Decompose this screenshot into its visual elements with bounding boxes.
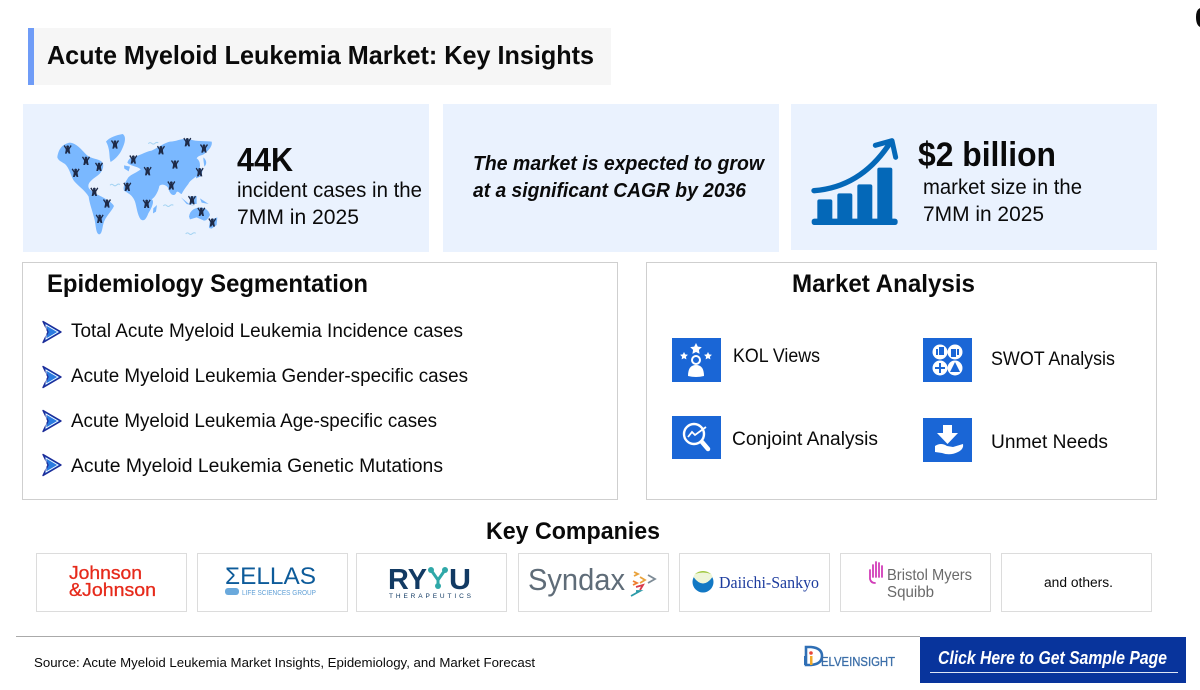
icon: world map with patients [57,134,217,234]
button: sample page [920,637,1186,683]
heading: Epidemiology Segmentation [47,270,368,298]
KOL views item: KOL Views [733,346,820,367]
title [28,28,611,85]
panel: epidemiology segmentation [22,262,618,500]
SWOT analysis item [923,338,1115,382]
icon: growth chart [812,141,898,225]
logo: Bristol Myers Squibb: Bristol Myers [887,567,972,584]
logo: DelveInsight [804,647,895,669]
panel: market analysis [646,262,1156,500]
unmet needs item [923,418,1108,462]
logo: Daiichi-Sankyo [680,554,830,612]
panel: market size [791,104,1157,250]
logo: SELLAS: LIFE SCIENCES GROUP [242,588,316,597]
logo: SELLAS [198,554,348,612]
heading: Market Analysis [792,270,975,298]
logo: Johnson & Johnson: Johnson [69,563,142,583]
list item 1: Total Acute Myeloid Leukemia Incidence cases [71,321,463,342]
logo: Syndax [518,554,668,612]
stat: $2 billion: $2 billion [918,136,1056,174]
heading: key companies: Key Companies [486,518,660,545]
box: and others: and others. [1044,575,1113,590]
logo: RYVU: U [449,564,471,596]
source note: Source: Acute Myeloid Leukemia Market Insights, Epidemiology, and Market Forecast [34,655,535,670]
stat description [923,176,1082,226]
logo: Bristol Myers Squibb: Squibb [887,584,934,601]
stat description: 7MM in 2025 [923,203,1044,226]
SWOT analysis item: SWOT Analysis [991,349,1115,370]
panel: incident cases [23,104,429,252]
logo: Daiichi-Sankyo: Daiichi-Sankyo [719,573,819,592]
list item 3: Acute Myeloid Leukemia Age-specific cases [71,411,437,432]
panel: growth statement: The market is expected to grow [473,153,765,175]
conjoint analysis item [672,416,878,459]
logo: DelveInsight: ELVEINSIGHT [821,654,895,669]
stat description [237,179,422,229]
stat: 44K: 44K [237,141,293,178]
panel: growth statement [443,104,779,252]
logo: RYVU [356,554,506,612]
footer rule [16,636,920,637]
conjoint analysis item: Conjoint Analysis [732,429,878,450]
logo: Syndax: Syndax [528,562,625,597]
stat description: incident cases in the [237,179,422,202]
list item 2: Acute Myeloid Leukemia Gender-specific cases [71,366,468,387]
logo: RYVU: RY [388,564,427,596]
stat description: 7MM in 2025 [237,206,359,229]
box: and others [1002,554,1152,612]
logo: Johnson & Johnson: &Johnson [69,580,156,600]
logo: Johnson & Johnson [36,554,186,612]
KOL views item [672,338,820,382]
logo: RYVU: THERAPEUTICS [389,593,472,600]
list item 4: Acute Myeloid Leukemia Genetic Mutations [71,456,443,477]
logo: SELLAS: ΣELLAS [225,563,316,590]
panel: growth statement: at a significant CAGR by 2036 [473,180,747,202]
button: sample page: Click Here to Get Sample Page [938,648,1167,668]
corner glyph fragment [1196,8,1200,27]
title: Acute Myeloid Leukemia Market: Key Insights [47,40,594,70]
unmet needs item: Unmet Needs [991,432,1108,453]
stat description: market size in the [923,176,1082,199]
logo: Bristol Myers Squibb [840,554,990,612]
